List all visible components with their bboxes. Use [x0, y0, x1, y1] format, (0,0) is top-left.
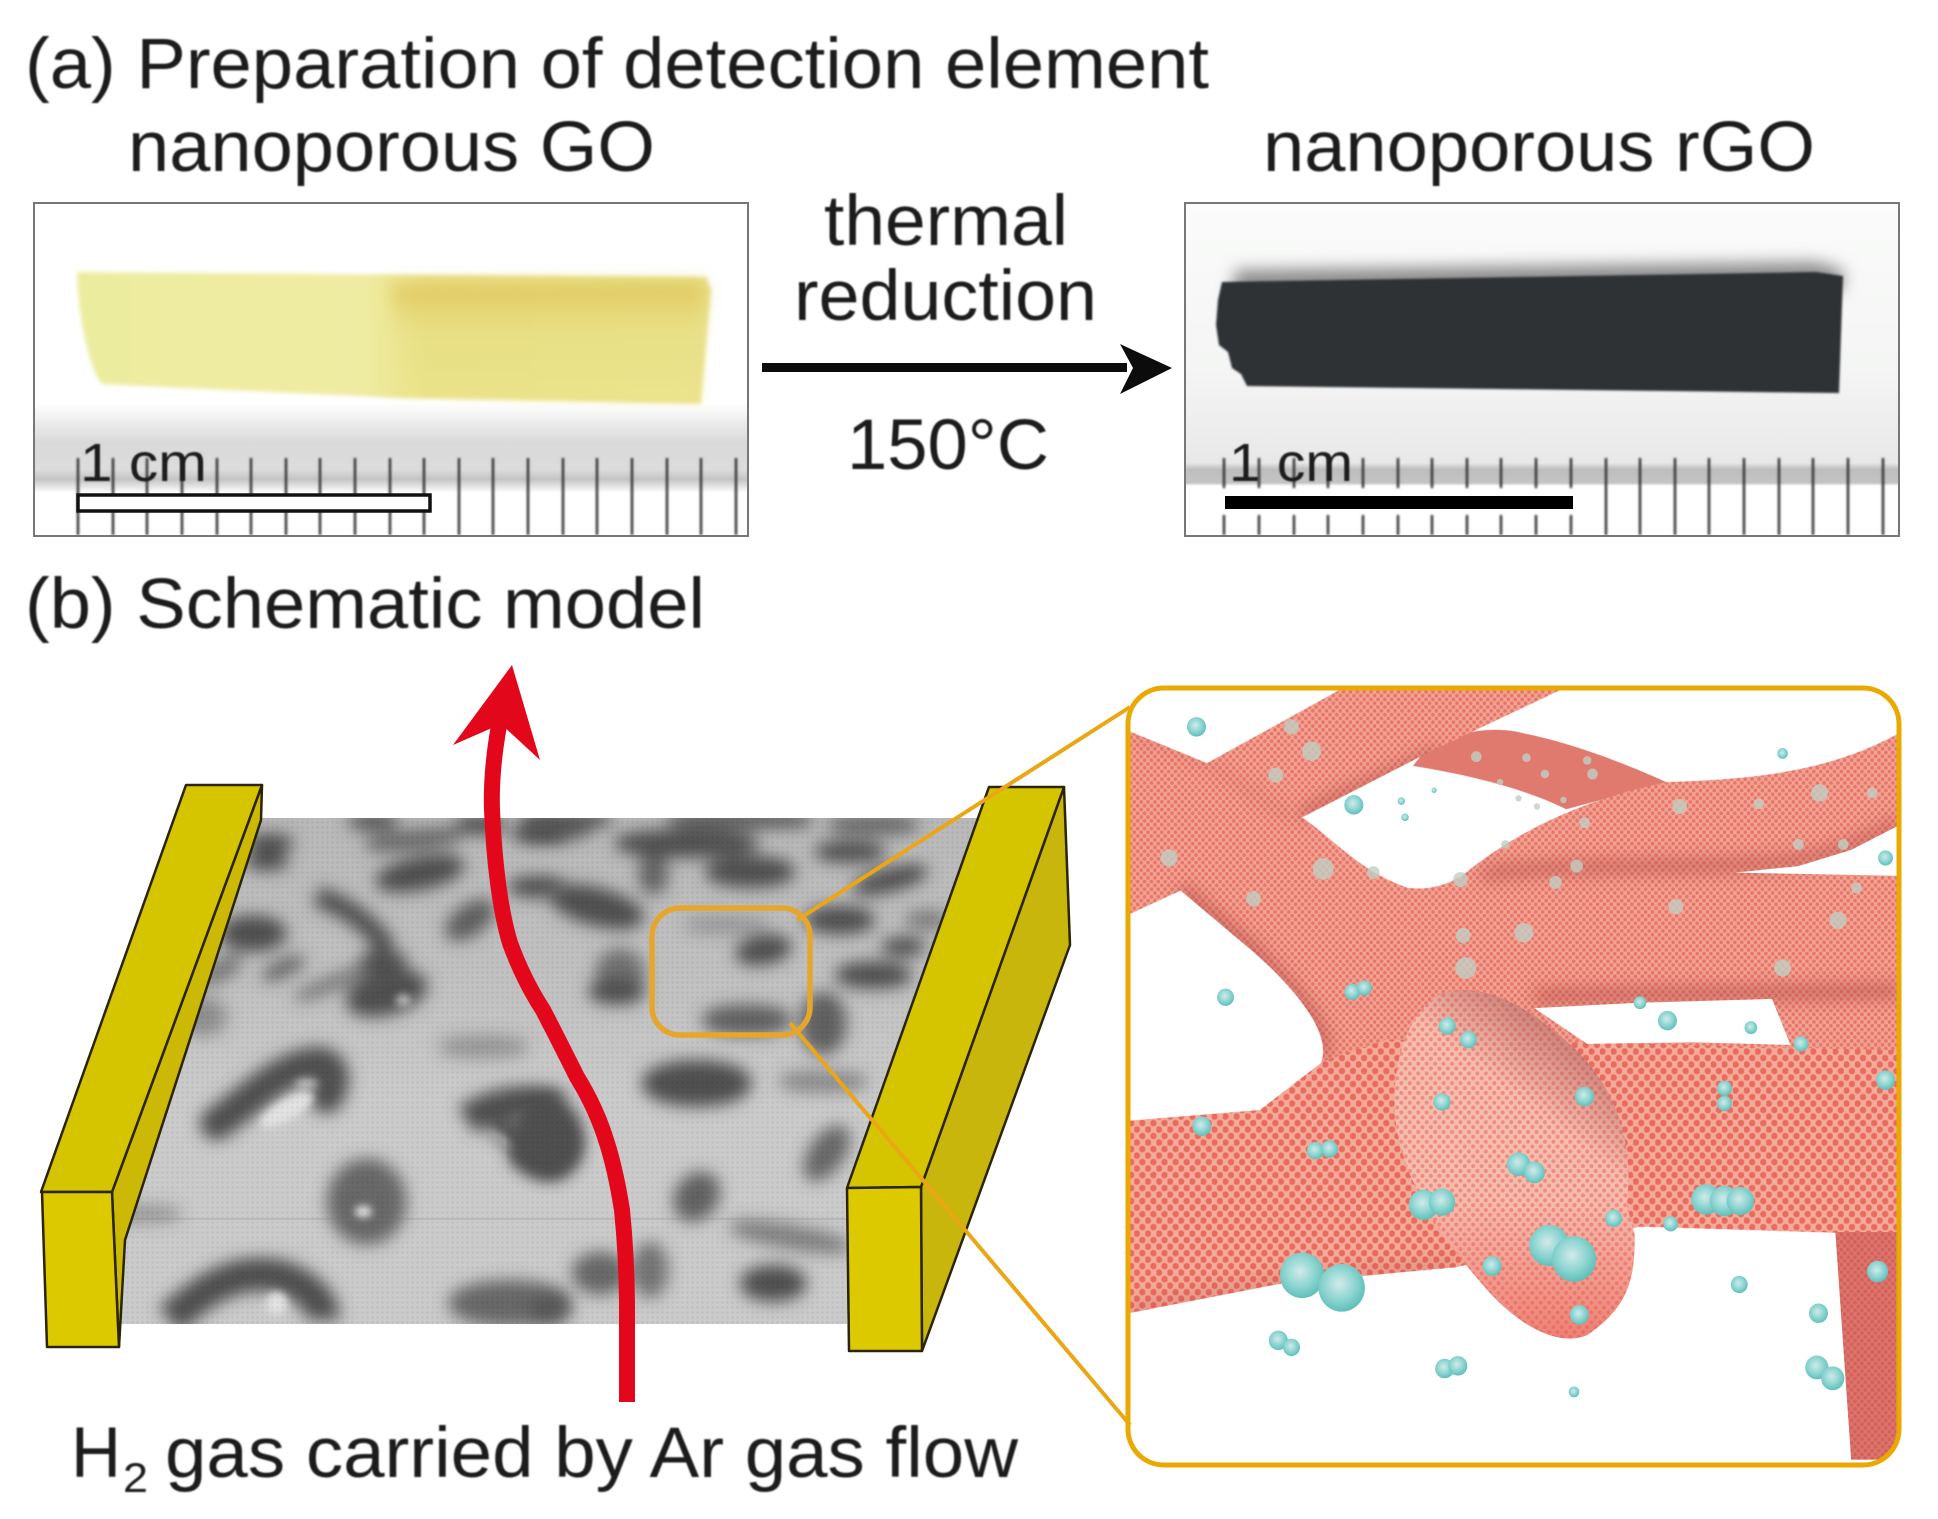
- porous surface: [100, 810, 1000, 1340]
- caption: H2 gas carried by Ar gas flow: gas carried by Ar gas flow: [165, 1414, 1019, 1493]
- label: reduction: reduction: [794, 257, 1097, 336]
- white gap: between tubes: [1534, 999, 1790, 1045]
- black rGO strip: [1216, 262, 1843, 393]
- label: 150°C: 150°C: [847, 406, 1049, 485]
- H2 molecules: [1187, 717, 1895, 1397]
- orange tint of the strip: [390, 282, 706, 400]
- caption: H2 gas carried by Ar gas flow: 2: [123, 1454, 148, 1501]
- zoom callout lines: [790, 707, 1130, 1425]
- tube shading: [1128, 731, 1899, 1311]
- ruler ticks: [1224, 458, 1883, 535]
- heading: (b) Schematic model: (b) Schematic model: [25, 565, 705, 644]
- label: nanoporous rGO: nanoporous rGO: [1263, 108, 1815, 187]
- yellow GO strip: [77, 272, 711, 404]
- panel border: [1128, 688, 1899, 1465]
- arrow: H2 gas flow: [453, 665, 627, 1402]
- left electrode: [41, 785, 262, 1347]
- zoomed panel: rGO nanostructure with H2 molecules: [1128, 687, 1899, 1465]
- right electrode: [847, 787, 1070, 1351]
- scale bar: [78, 495, 430, 511]
- graphene tube network: [1128, 687, 1899, 1313]
- scale label: 1 cm: [1229, 433, 1353, 493]
- label: nanoporous GO: nanoporous GO: [128, 108, 655, 187]
- lower tube with coarse lattice: [1128, 1040, 1899, 1313]
- back tube: [1413, 730, 1666, 809]
- photo: nanoporous GO strip with ruler: [34, 203, 748, 536]
- photo: nanoporous rGO strip with ruler: [1185, 203, 1899, 536]
- curled flap: [1394, 990, 1635, 1338]
- scale bar: [1225, 496, 1573, 509]
- caption: H2 gas carried by Ar gas flow: H: [71, 1414, 121, 1493]
- lower right tube: [1835, 1232, 1899, 1460]
- schematic: porous graphene sheet between electrodes: [41, 785, 1070, 1351]
- label: thermal: thermal: [824, 182, 1068, 261]
- arrow: thermal reduction: [762, 344, 1172, 394]
- white gap: upper right: [1735, 825, 1899, 876]
- distant H2 molecules: [1161, 719, 1878, 979]
- region of interest box: [652, 908, 810, 1035]
- heading: (a) Preparation of detection element: (a) Preparation of detection element: [25, 25, 1209, 104]
- scale label: 1 cm: [80, 433, 207, 493]
- seam across the sheet: [100, 1218, 880, 1220]
- ruler ticks: [78, 458, 736, 535]
